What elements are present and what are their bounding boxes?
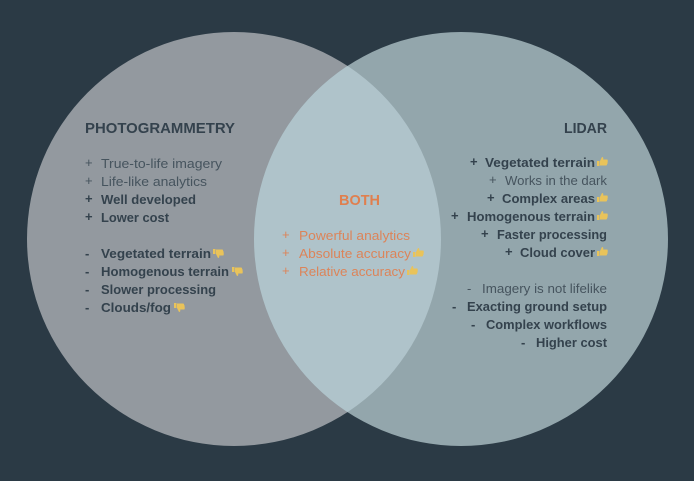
circle: photogrammetry bbox=[27, 32, 441, 446]
list: photogrammetry pros: + bbox=[85, 173, 93, 188]
list: lidar pros: + bbox=[470, 154, 478, 169]
list: lidar pros: Vegetated terrain bbox=[485, 155, 595, 170]
list: both bbox=[282, 227, 424, 279]
list: photogrammetry cons: - bbox=[85, 282, 89, 297]
heading: lidar: LIDAR bbox=[564, 120, 607, 137]
list: photogrammetry pros: Lower cost bbox=[101, 210, 170, 225]
list: photogrammetry pros: + bbox=[85, 209, 93, 224]
list: both: Relative accuracy bbox=[299, 264, 406, 279]
list: lidar pros: + bbox=[505, 244, 513, 259]
list: lidar cons: Exacting ground setup bbox=[467, 299, 607, 314]
list: lidar pros: Cloud cover bbox=[520, 245, 595, 260]
list: both: + bbox=[282, 245, 290, 260]
list: lidar cons: Imagery is not lifelike bbox=[482, 281, 607, 296]
list: photogrammetry cons: - bbox=[85, 264, 89, 279]
heading: both: BOTH bbox=[339, 192, 380, 209]
list: lidar pros: + bbox=[451, 208, 459, 223]
list: lidar pros: + bbox=[489, 172, 497, 187]
list: lidar cons: - bbox=[471, 317, 475, 332]
list: photogrammetry pros: Life-like analytics bbox=[101, 174, 208, 189]
list: lidar cons: Higher cost bbox=[536, 335, 608, 350]
list: photogrammetry cons bbox=[85, 246, 243, 315]
list: lidar pros: Complex areas bbox=[502, 191, 595, 206]
list: lidar pros: Homogenous terrain bbox=[467, 209, 595, 224]
panel: both text bbox=[282, 192, 424, 279]
list: both: + bbox=[282, 227, 290, 242]
list: lidar cons bbox=[452, 281, 608, 350]
list: photogrammetry cons: - bbox=[85, 300, 89, 315]
circle: lidar bbox=[254, 32, 668, 446]
list: lidar pros: Faster processing bbox=[497, 227, 607, 242]
list: both: + bbox=[282, 263, 290, 278]
list: both: Absolute accuracy bbox=[299, 246, 412, 261]
list: photogrammetry cons: Homogenous terrain bbox=[101, 264, 229, 279]
list: photogrammetry pros: True-to-life imagery bbox=[101, 156, 223, 171]
list: lidar cons: - bbox=[452, 299, 456, 314]
list: photogrammetry cons: - bbox=[85, 246, 89, 261]
list: photogrammetry cons: Clouds/fog bbox=[101, 300, 171, 315]
list: photogrammetry pros: + bbox=[85, 155, 93, 170]
list: lidar pros: + bbox=[487, 190, 495, 205]
list: photogrammetry pros bbox=[85, 155, 223, 225]
heading: photogrammetry: PHOTOGRAMMETRY bbox=[85, 120, 235, 137]
list: lidar pros: + bbox=[481, 226, 489, 241]
list: photogrammetry pros: + bbox=[85, 191, 93, 206]
list: lidar cons: Complex workflows bbox=[486, 317, 607, 332]
list: lidar pros bbox=[451, 154, 608, 260]
list: lidar pros: Works in the dark bbox=[505, 173, 607, 188]
list: photogrammetry cons: Vegetated terrain bbox=[101, 246, 211, 261]
circle overlap: both bbox=[254, 66, 441, 412]
list: lidar cons: - bbox=[467, 281, 471, 296]
list: lidar cons: - bbox=[521, 335, 525, 350]
panel: lidar text bbox=[451, 120, 608, 350]
list: photogrammetry cons: Slower processing bbox=[101, 282, 216, 297]
list: photogrammetry pros: Well developed bbox=[101, 192, 196, 207]
panel: photogrammetry text bbox=[85, 120, 243, 315]
list: both: Powerful analytics bbox=[299, 228, 411, 243]
